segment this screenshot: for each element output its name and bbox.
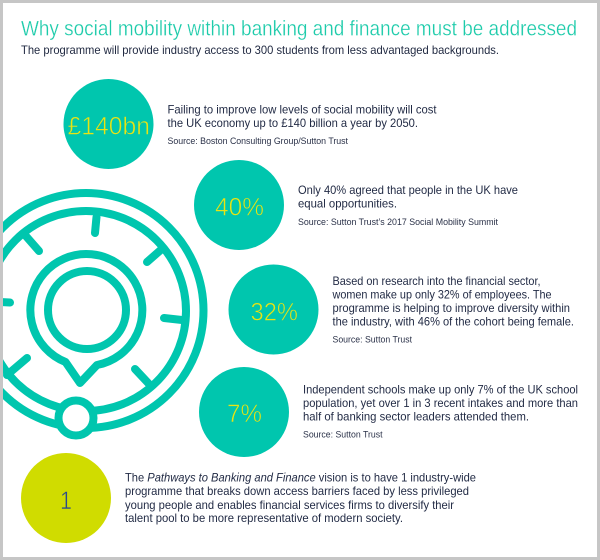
- stat: £140bn: [64, 79, 437, 169]
- stat: 7%: 7%: [227, 400, 262, 428]
- stat: 7%: half of banking sector leaders attended them.: [303, 410, 529, 424]
- vision callout: 1 programme: [21, 453, 476, 543]
- subtitle: The programme will provide industry access to 300 students from less advantaged backgrounds.: [21, 43, 499, 57]
- stat: 32%: Source: Sutton Trust: [332, 334, 412, 344]
- icon: dial with location pin: [0, 193, 204, 436]
- stat: 7%: [199, 367, 578, 457]
- vision callout: 1 programme: programme that breaks down access barriers faced by less privileged: [125, 484, 469, 498]
- vision callout: 1 programme: talent pool to be more representative of modern society.: [125, 511, 403, 525]
- stat: 40%: Only 40% agreed that people in the UK have: [298, 183, 518, 197]
- stat: 40%: 40%: [215, 194, 264, 222]
- vision callout: 1 programme: The Pathways to Banking and Finance vision is to have 1 industry-wide: [125, 470, 476, 484]
- stat: 40%: [194, 160, 518, 250]
- stat: 32%: Based on research into the financial sector,: [332, 274, 540, 288]
- stat: 32%: programme is helping to improve diversity within: [332, 301, 570, 315]
- stat: 32%: women make up only 32% of employees. The: [332, 288, 552, 302]
- stat: 7%: Independent schools make up only 7% of the UK school: [303, 382, 578, 396]
- stat: 7%: population, yet over 1 in 3 recent intakes and more than: [303, 396, 578, 410]
- vision callout: 1 programme: 1: [60, 487, 72, 515]
- stat: £140bn: the UK economy up to £140 billion a year by 2050.: [168, 116, 418, 130]
- stat: 40%: Source: Sutton Trust’s 2017 Social Mobility Summit: [298, 216, 498, 227]
- stat: 32%: [228, 264, 574, 354]
- stat: 40%: equal opportunities.: [298, 196, 397, 210]
- stat: 7%: Source: Sutton Trust: [303, 428, 383, 440]
- vision callout: 1 programme: young people and enables financial services firms to diversify their: [125, 498, 454, 512]
- stat: £140bn: Source: Boston Consulting Group/Sutton Trust: [168, 135, 348, 146]
- stat: £140bn: Failing to improve low levels of social mobility will cost: [168, 102, 437, 116]
- stat: 32%: 32%: [250, 298, 298, 326]
- stat: £140bn: £140bn: [68, 112, 150, 140]
- stat: 32%: the industry, with 46% of the cohort being female.: [332, 314, 574, 328]
